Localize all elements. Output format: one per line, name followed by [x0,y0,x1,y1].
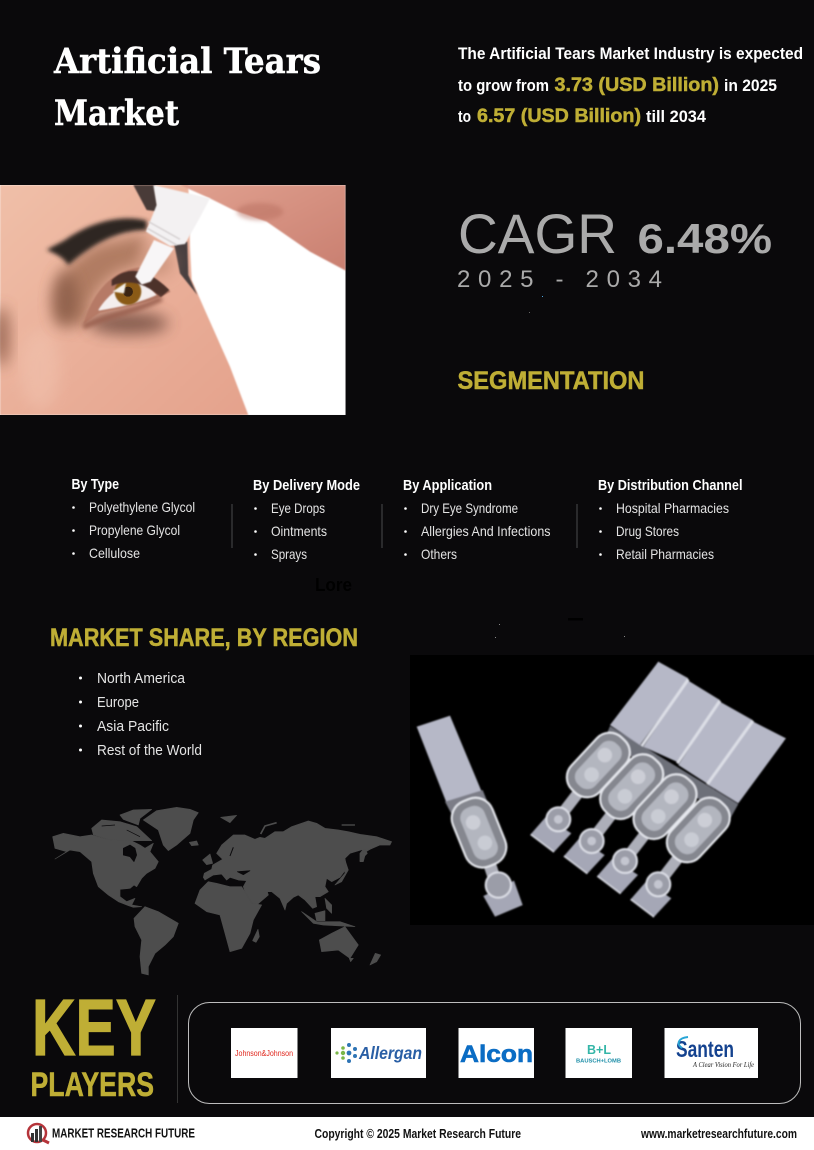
region list: Europe [97,694,139,711]
CAGR figure: 6.48% [638,215,772,262]
ampoule: single left [417,716,523,917]
logo: Santen: Santen [676,1036,734,1062]
logo: Johnson & Johnson [231,1028,298,1078]
segment: by delivery mode: Sprays [271,546,307,562]
segment: by type: Cellulose [89,545,140,561]
faint stray text: Lore [315,575,352,595]
title: Artificial Tears [53,41,321,82]
market forecast text: to grow from [458,77,549,95]
logo: Johnson & Johnson: Johnson&Johnson [235,1049,293,1058]
market forecast text: till 2034 [646,108,707,126]
segment: by distribution channel [598,477,742,562]
logo: Santen [664,1028,758,1078]
market forecast text: to [458,108,471,126]
key players heading: KEY [32,983,156,1072]
icon: Market Research Future logo [28,1124,49,1143]
title: Market [54,93,179,134]
segment: by distribution channel: Hospital Pharmacies [616,500,729,516]
ampoule strip: tabs [605,662,786,825]
region list [79,670,202,759]
market forecast text: 6.57 (USD Billion) [477,105,641,127]
segment: by distribution channel: Drug Stores [616,523,679,539]
segment: by application: Dry Eye Syndrome [421,500,518,516]
key players heading: PLAYERS [30,1066,154,1104]
CAGR figure: CAGR [458,202,617,265]
segment: by distribution channel: By Distribution Channel [598,477,742,494]
segment: by delivery mode: By Delivery Mode [253,477,360,494]
title [53,41,321,134]
segment: by delivery mode: Eye Drops [271,500,325,516]
footer: Copyright © 2025 Market Research Future [314,1127,521,1141]
logo: Alcon [458,1028,534,1078]
logo: Allergan: Allergan [358,1043,422,1063]
region list: Asia Pacific [97,718,169,735]
logo: Bausch + Lomb: BAUSCH+LOMB [576,1058,621,1064]
segment: by delivery mode [253,477,360,562]
market forecast text: 3.73 (USD Billion) [554,74,719,96]
key players panel [188,1002,800,1104]
region list: North America [97,670,186,687]
CAGR figure: 2025 - 2034 [457,266,662,293]
segment: by type: By Type [72,476,119,493]
segment: by application: Others [421,546,457,562]
photo: eye drops [0,185,346,415]
logo: Alcon: Alcon [460,1041,533,1068]
market share heading: MARKET SHARE, BY REGION [50,624,358,652]
market forecast text: in 2025 [724,77,777,95]
world map [53,807,392,975]
ampoule strip: bodies [531,725,737,917]
market forecast text [458,45,803,127]
region list: Rest of the World [97,742,202,759]
segment: by type [72,476,195,561]
segment: by delivery mode: Ointments [271,523,327,539]
logo: Santen: A Clear Vision For Life [692,1061,754,1069]
key players heading [30,983,156,1104]
segment: by application: By Application [403,477,492,494]
segment: by distribution channel: Retail Pharmacies [616,546,714,562]
specks [542,296,543,297]
segment: by type: Polyethylene Glycol [89,499,195,515]
logo: Bausch + Lomb [566,1028,632,1078]
CAGR figure [457,202,772,293]
segmentation heading: SEGMENTATION [458,367,644,395]
footer [0,1117,814,1150]
segment: by application: Allergies And Infections [421,523,550,539]
footer: MARKET RESEARCH FUTURE [52,1126,195,1140]
segment: by type: Propylene Glycol [89,522,180,538]
logo: Allergan [331,1028,426,1078]
photo: eye drop ampoules [410,655,814,925]
segment: by application [403,477,550,562]
logo: Bausch + Lomb: B+L [587,1042,611,1057]
